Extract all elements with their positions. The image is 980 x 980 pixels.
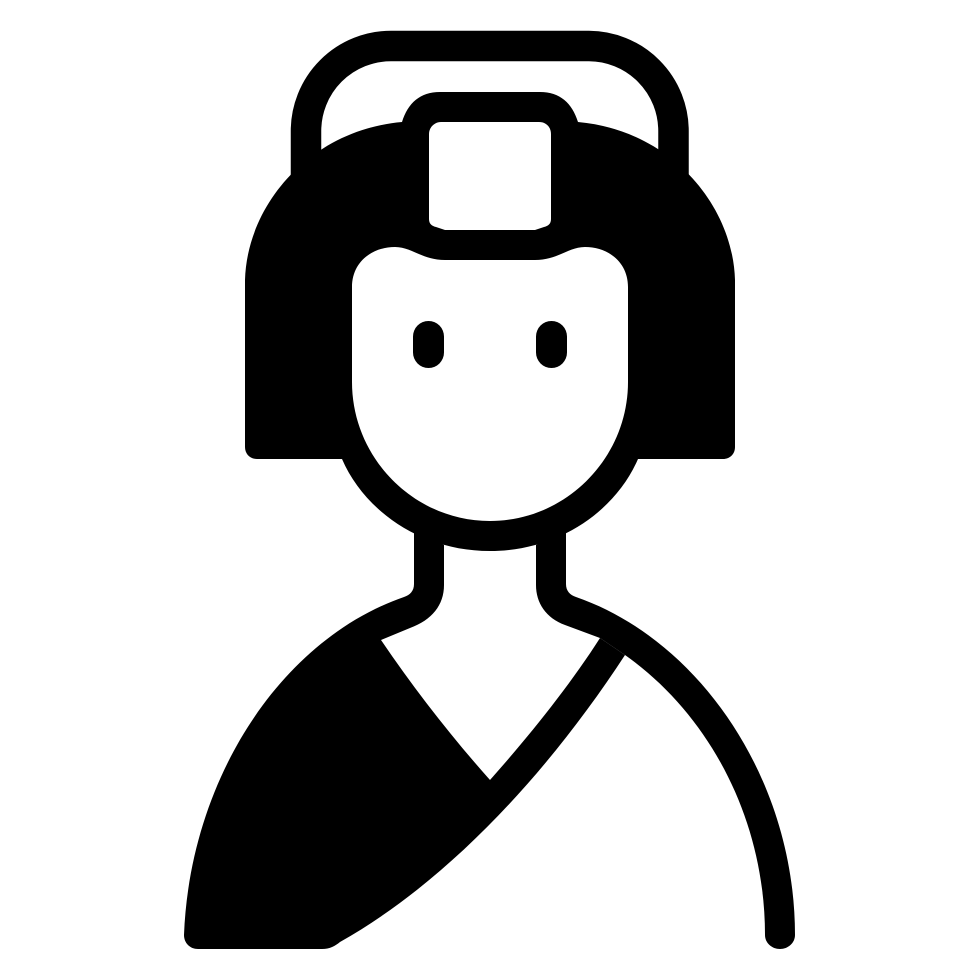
left eye bbox=[413, 321, 444, 368]
right eye bbox=[536, 321, 567, 368]
neck and left robe panel bbox=[184, 528, 625, 949]
hair ornament square bbox=[429, 122, 551, 230]
face bbox=[352, 247, 628, 521]
right neck line and shoulder bbox=[536, 528, 795, 949]
hair bbox=[245, 92, 735, 551]
hair ornament arch bbox=[306, 46, 674, 185]
